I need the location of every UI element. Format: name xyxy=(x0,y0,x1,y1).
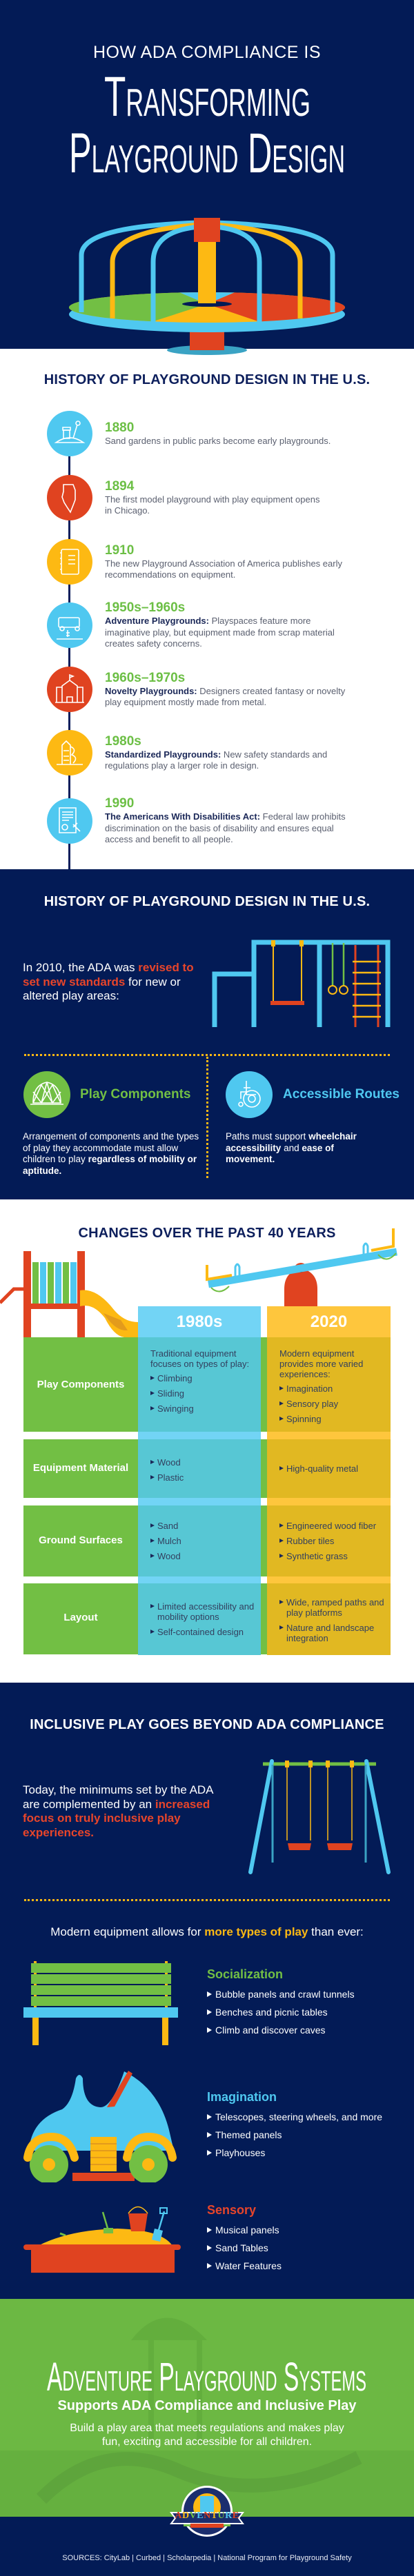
panel: ada 2010 standards xyxy=(0,869,414,1199)
row label: layout: Layout xyxy=(63,1612,98,1623)
cell: 1980s ground: Sand xyxy=(157,1521,178,1531)
text: 1910: 1910 xyxy=(105,543,134,557)
cell: 2020 ground: Engineered wood fiber xyxy=(286,1521,376,1531)
text: 1990: 1990 xyxy=(105,796,134,811)
text: 1990 xyxy=(105,796,346,844)
illustration: slide xyxy=(0,1251,138,1337)
icon: notebook 1910 xyxy=(47,539,92,585)
cell: 1980s material: Wood xyxy=(157,1457,181,1468)
category: socialization: Climb and discover caves xyxy=(215,2025,326,2036)
text: 1950s-1960s: creates safety concerns. xyxy=(105,638,202,649)
category: imagination: Playhouses xyxy=(215,2147,265,2158)
heading: INCLUSIVE PLAY GOES BEYOND ADA COMPLIANCE xyxy=(30,1717,384,1732)
cell: 1980s play components: Swinging xyxy=(157,1403,194,1414)
text: 1980s: 1980s xyxy=(105,733,141,749)
header: 1980s: 1980s xyxy=(177,1312,222,1331)
header panel xyxy=(0,0,414,349)
label: accessible routes: Accessible Routes xyxy=(283,1087,400,1102)
text: 1880 xyxy=(105,420,331,446)
row label: equipment material: Equipment Material xyxy=(33,1462,128,1474)
timeline xyxy=(47,411,346,869)
illustration: sandbox xyxy=(23,2206,181,2273)
cell: 2020 play components: Sensory play xyxy=(286,1399,338,1409)
text: 1980s xyxy=(105,733,327,771)
text: 1880: Sand gardens in public parks become early playgrounds. xyxy=(105,436,331,446)
icon: illinois 1894 xyxy=(47,475,92,520)
category: sensory: Sand Tables xyxy=(215,2242,268,2253)
cell: 2020 ground xyxy=(279,1521,376,1561)
illustration: bench xyxy=(23,1961,178,2045)
category: sensory: Sensory xyxy=(207,2203,256,2217)
icon: dome climber xyxy=(23,1071,70,1118)
text: more types of play: Modern equipment allows for more types of play than ever: xyxy=(50,1925,364,1938)
text: 1960s-1970s: Novelty Playgrounds: Designers created fantasy or novelty xyxy=(105,685,345,696)
sources: SOURCES: CityLab | Curbed | Scholarpedia | National Program for Playground Safety xyxy=(62,2554,352,2562)
category: imagination: Themed panels xyxy=(215,2129,282,2140)
cell: 1980s play components: Climbing xyxy=(157,1373,193,1383)
text: 1894: 1894 xyxy=(105,478,134,494)
text: 1980s: Standardized Playgrounds: New safety standards and xyxy=(105,749,327,760)
logo: adventure playground systems: ADVENTURE xyxy=(175,2511,239,2521)
cell: 1980s layout xyxy=(150,1601,254,1637)
illustration: merry-go-round xyxy=(69,218,345,355)
text: accessible routes: Paths must support wheelchair accessibility and ease of movement. xyxy=(226,1131,357,1164)
cell: 1980s ground: Wood xyxy=(157,1551,181,1561)
cta text xyxy=(70,2422,344,2448)
category: socialization xyxy=(207,1967,355,2036)
subtitle: how ada compliance is: HOW ADA COMPLIANCE IS xyxy=(93,43,321,62)
text: 1894: The first model playground with play equipment opens xyxy=(105,494,319,505)
panel: adventure playground systems cta xyxy=(0,2299,414,2517)
text: 1980s: regulations play a larger role in design. xyxy=(105,760,259,771)
text: 1910: The new Playground Association of America publishes early xyxy=(105,558,342,568)
text: 1910: recommendations on equipment. xyxy=(105,569,235,580)
cell: 2020 layout xyxy=(279,1597,384,1643)
logo: adventure playground systems xyxy=(170,2486,244,2537)
panel: inclusive play xyxy=(0,1683,414,2299)
cta text: fun, exciting and accessible for all children. xyxy=(102,2436,312,2448)
category: socialization: Benches and picnic tables xyxy=(215,2007,328,2018)
cell: 1980s material xyxy=(150,1457,184,1483)
text: 1880: 1880 xyxy=(105,420,134,435)
cell: 2020 play components xyxy=(279,1348,363,1424)
intro text: Today, the minimums set by the ADA are complemented by an increased focus on truly inclusive play experiences. xyxy=(23,1783,213,1839)
cta text: Build a play area that meets regulations and makes play xyxy=(70,2422,344,2434)
cell: 2020 ground: Synthetic grass xyxy=(286,1551,348,1561)
text: 1910 xyxy=(105,543,342,580)
heading: history of playground design: HISTORY OF PLAYGROUND DESIGN IN THE U.S. xyxy=(44,372,370,387)
icon: spring rider 1950s xyxy=(47,602,92,648)
icon: sand castle 1880 xyxy=(47,411,92,456)
heading: changes over the past 40 years: CHANGES OVER THE PAST 40 YEARS xyxy=(78,1226,336,1241)
icon: tower slide 1980s xyxy=(47,730,92,775)
illustration: swing set xyxy=(248,1759,391,1874)
illustration: spring rider car xyxy=(23,2071,177,2182)
comparison table xyxy=(23,1306,391,1655)
cell: 1980s ground: Mulch xyxy=(157,1536,181,1546)
cell: 2020 layout: Wide, ramped paths and play platforms xyxy=(286,1597,384,1618)
cell: 2020 play components: Spinning xyxy=(286,1414,322,1424)
icon: law document 1990 xyxy=(47,798,92,844)
row label: ground surfaces: Ground Surfaces xyxy=(39,1534,123,1546)
cell: 2020 ground: Rubber tiles xyxy=(286,1536,334,1546)
category: imagination: Imagination xyxy=(207,2090,277,2104)
category: socialization: Bubble panels and crawl tunnels xyxy=(215,1989,355,2000)
cell: 2020 layout: Nature and landscape integration xyxy=(286,1623,374,1643)
cell: 1980s play components xyxy=(150,1348,249,1414)
cell: 1980s layout: Self-contained design xyxy=(157,1627,244,1637)
header: 2020: 2020 xyxy=(310,1312,347,1331)
category: socialization: Socialization xyxy=(207,1967,283,1981)
cell: 1980s play components: Traditional equipment focuses on types of play: xyxy=(150,1348,249,1369)
text: 1990: access and benefit to all people. xyxy=(105,834,233,844)
divider dots xyxy=(24,1054,390,1056)
text: 1990: The Americans With Disabilities Act: Federal law prohibits xyxy=(105,811,346,822)
heading: HISTORY OF PLAYGROUND DESIGN IN THE U.S. xyxy=(44,894,370,909)
label: play components: Play Components xyxy=(80,1087,190,1102)
text: 1950s-1960s: 1950s–1960s xyxy=(105,600,185,615)
row label: play components: Play Components xyxy=(37,1379,124,1390)
category: sensory: Musical panels xyxy=(215,2224,279,2235)
illustration: seesaw xyxy=(206,1228,397,1306)
text: play components: Arrangement of components and the types of play they accommodate must allow children to play regardless of mobility or aptitude. xyxy=(23,1131,199,1176)
cell: 2020 material: High-quality metal xyxy=(286,1463,358,1474)
cta subtitle: Supports ADA Compliance and Inclusive Play xyxy=(57,2398,357,2413)
icon: wheelchair xyxy=(226,1071,273,1118)
category: sensory: Water Features xyxy=(215,2260,282,2271)
text: 1960s-1970s xyxy=(105,670,345,707)
main title xyxy=(69,65,345,179)
cell: 2020 play components: Imagination xyxy=(286,1383,333,1394)
cell: 1980s play components: Sliding xyxy=(157,1388,184,1399)
footer xyxy=(0,2517,414,2576)
category: sensory xyxy=(207,2203,282,2271)
cell: 2020 play components: Modern equipment provides more varied experiences: xyxy=(279,1348,363,1379)
cell: 1980s layout: Limited accessibility and mobility options xyxy=(157,1601,254,1622)
text: 1990: discrimination on the basis of disability and ensures equal xyxy=(105,823,334,833)
text: 1894 xyxy=(105,478,319,516)
intro text: In 2010, the ADA was revised to set new standards for new or altered play areas: xyxy=(23,961,194,1002)
cell: 1980s ground xyxy=(150,1521,181,1561)
illustration: jungle gym xyxy=(213,940,391,1027)
icon: castle 1960s xyxy=(47,667,92,712)
text: 1960s-1970s: 1960s–1970s xyxy=(105,670,185,685)
text: 1894: in Chicago. xyxy=(105,505,150,516)
category: imagination: Telescopes, steering wheels, and more xyxy=(215,2111,382,2122)
text: 1950s-1960s xyxy=(105,600,335,649)
text: 1960s-1970s: play equipment mostly made from metal. xyxy=(105,697,266,707)
cell: 1980s material: Plastic xyxy=(157,1472,184,1483)
category: imagination xyxy=(207,2090,382,2158)
text: 1950s-1960s: imaginative play, but equipment made from scrap material xyxy=(105,627,335,638)
text: 1950s-1960s: Adventure Playgrounds: Playspaces feature more xyxy=(105,616,310,626)
